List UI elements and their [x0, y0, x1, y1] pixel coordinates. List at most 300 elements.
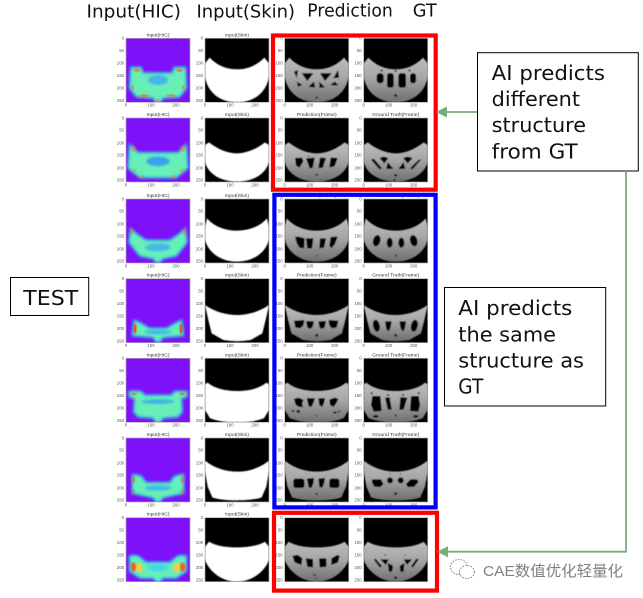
plot: row 3 HIC heatmap: 200 [117, 246, 125, 251]
plot: row 6 prediction frame: 100 [306, 502, 314, 507]
plot: row 1 HIC heatmap: 100 [117, 61, 125, 66]
callout: AI predicts the same structure as GT: structure as [458, 348, 584, 372]
plot: row 3 prediction frame: 100 [306, 263, 314, 268]
plot: row 1 prediction frame: 200 [275, 86, 283, 91]
plot: row 4 skin mask: Input(Skin) [225, 273, 249, 279]
plot: row 4 skin mask [196, 273, 269, 348]
plot: row 3 skin mask: 0 [204, 263, 207, 268]
plot: row 7 HIC heatmap: 0 [122, 515, 125, 520]
plot: row 6 prediction frame: 200 [275, 485, 283, 490]
plot: row 7 skin mask: Input(Skin) [225, 512, 249, 518]
row 6 plots [117, 432, 428, 507]
plot: row 4 ground truth frame: Ground Truth(Frame) [372, 273, 420, 279]
plot: row 1 ground truth frame: 150 [354, 73, 362, 78]
plot: row 5 prediction frame: 0 [280, 356, 283, 361]
plot: row 6 HIC heatmap: 200 [172, 502, 180, 507]
plot: row 1 prediction frame: 0 [280, 36, 283, 41]
plot: row 4 skin mask: 100 [196, 301, 204, 306]
plot: row 1 HIC heatmap: 250 [117, 98, 125, 103]
plot: row 2 skin mask: Input(Skin) [225, 112, 249, 118]
plot: row 5 skin mask: 50 [198, 368, 204, 373]
plot: row 7 ground truth frame: 150 [354, 552, 362, 557]
plot: row 3 HIC heatmap: 50 [119, 209, 125, 214]
plot: row 4 prediction frame: 200 [331, 343, 339, 348]
plot: row 2 skin mask: 0 [204, 182, 207, 187]
plot: row 5 HIC heatmap: 0 [125, 423, 128, 428]
plot: row 3 ground truth frame: 100 [354, 221, 362, 226]
callout: AI predicts the same structure as GT: GT [458, 374, 484, 398]
plot: row 2 skin mask: 200 [196, 165, 204, 170]
callout: AI predicts different structure from GT: AI predicts [492, 61, 605, 85]
plot: row 6 ground truth frame: 50 [357, 448, 362, 453]
plot: row 4 HIC heatmap: Input(HIC) [146, 273, 170, 279]
plot: row 5 HIC heatmap: 150 [117, 393, 125, 398]
plot: row 1 HIC heatmap: 0 [125, 103, 128, 108]
plot: row 7 HIC heatmap: 100 [117, 540, 125, 545]
plot: row 3 ground truth frame: Ground Truth(Frame) [372, 193, 420, 199]
plot: row 4 HIC heatmap: 100 [117, 301, 125, 306]
plot: row 4 prediction frame: 100 [306, 343, 314, 348]
plot: row 4 prediction frame: Prediction(Frame) [297, 273, 337, 279]
plot: row 7 HIC heatmap [117, 512, 190, 582]
plot: row 1 skin mask: 100 [196, 61, 204, 66]
plot: row 3 prediction frame: 250 [275, 259, 283, 264]
callout: AI predicts the same structure as GT [444, 288, 606, 406]
plot: row 3 ground truth frame: 150 [354, 234, 362, 239]
plot: row 3 HIC heatmap [117, 193, 190, 268]
plot: row 1 skin mask [196, 32, 269, 108]
plot: row 7 HIC heatmap: 50 [119, 527, 125, 532]
plot: row 3 skin mask: Input(Skin) [225, 193, 249, 199]
plot: row 1 prediction frame: 100 [275, 61, 283, 66]
plot: row 7 ground truth frame: 50 [357, 527, 362, 532]
plot: row 4 HIC heatmap: 200 [117, 326, 125, 331]
plot: row 6 skin mask: 200 [196, 485, 204, 490]
plot: row 2 skin mask: 50 [198, 128, 204, 133]
plot: row 5 skin mask: 100 [226, 423, 234, 428]
plot: row 1 skin mask: 150 [196, 73, 204, 78]
plot: row 6 prediction frame: 50 [278, 448, 283, 453]
plot: row 7 prediction frame: 50 [278, 527, 283, 532]
column heading: Prediction: Prediction [307, 1, 393, 22]
plot: row 6 ground truth frame: 0 [362, 502, 365, 507]
plot: row 4 ground truth frame [354, 273, 428, 348]
plot: row 2 skin mask: 200 [251, 182, 259, 187]
plot: row 5 skin mask: 0 [204, 423, 207, 428]
plot: row 4 prediction frame: 200 [275, 326, 283, 331]
plot: row 5 prediction frame: Prediction(Frame) [297, 352, 337, 358]
plot: row 1 skin mask: 250 [196, 98, 204, 103]
plot: row 5 prediction frame: 50 [278, 368, 283, 373]
plot: row 1 ground truth frame: 50 [357, 48, 362, 53]
row 7 plots [117, 512, 428, 582]
plot: row 5 skin mask: 0 [201, 356, 204, 361]
plot: row 3 skin mask [196, 193, 269, 268]
plot: row 2 skin mask: 150 [196, 153, 204, 158]
plot: row 7 skin mask: 150 [196, 552, 204, 557]
plot: row 3 HIC heatmap: 150 [117, 234, 125, 239]
plot: row 1 HIC heatmap: 50 [119, 48, 125, 53]
plot: row 6 ground truth frame: 100 [385, 502, 393, 507]
plot: row 1 skin mask: 100 [226, 103, 234, 108]
plot: row 6 HIC heatmap [117, 432, 190, 507]
plot: row 7 ground truth frame: 0 [359, 515, 362, 520]
plot: row 7 prediction frame: 250 [275, 577, 283, 582]
plot: row 6 prediction frame: 100 [275, 460, 283, 465]
plot: row 1 skin mask: 50 [198, 48, 204, 53]
plot: row 3 ground truth frame: 200 [410, 263, 418, 268]
plot: row 6 ground truth frame: 0 [359, 435, 362, 440]
plot: row 5 prediction frame: 250 [275, 418, 283, 423]
plot: row 6 skin mask: 0 [201, 435, 204, 440]
plot: row 5 HIC heatmap: Input(HIC) [146, 352, 170, 358]
plot: row 6 skin mask: 150 [196, 473, 204, 478]
plot: row 3 HIC heatmap: 100 [147, 263, 155, 268]
plot: row 3 skin mask: 200 [251, 263, 259, 268]
plot: row 3 skin mask: 50 [198, 209, 204, 214]
highlight box: top red [273, 36, 436, 190]
plot: row 1 prediction frame: 100 [306, 103, 314, 108]
plot: row 6 prediction frame: 250 [275, 498, 283, 503]
plot: row 6 HIC heatmap: 100 [117, 460, 125, 465]
plot: row 1 skin mask: 0 [204, 103, 207, 108]
plot: row 2 HIC heatmap: 0 [125, 182, 128, 187]
plot: row 3 ground truth frame: 250 [354, 259, 362, 264]
plot: row 3 ground truth frame [354, 193, 428, 268]
plot: row 4 skin mask: 50 [198, 288, 204, 293]
plot: row 3 prediction frame: 200 [331, 263, 339, 268]
plot: row 4 HIC heatmap: 0 [125, 343, 128, 348]
plot: row 1 ground truth frame [354, 36, 428, 108]
plot: row 1 HIC heatmap: 0 [122, 36, 125, 41]
plot: row 5 skin mask: 100 [196, 381, 204, 386]
plot: row 1 skin mask: 0 [201, 36, 204, 41]
plot: row 6 prediction frame: Prediction(Frame) [297, 432, 337, 438]
row 1 plots [117, 32, 428, 108]
plot: row 7 HIC heatmap: 150 [117, 552, 125, 557]
plot: row 4 ground truth frame: 50 [357, 288, 362, 293]
plot: row 3 prediction frame: 100 [275, 221, 283, 226]
plot: row 6 ground truth frame: 150 [354, 473, 362, 478]
callout: AI predicts different structure from GT: structure [492, 113, 586, 137]
plot: row 5 ground truth frame: 200 [354, 406, 362, 411]
plot: row 5 skin mask: 150 [196, 393, 204, 398]
row 5 plots [117, 352, 428, 428]
plot: row 2 HIC heatmap: 100 [147, 182, 155, 187]
plot: row 6 prediction frame: 0 [280, 435, 283, 440]
plot: row 1 prediction frame [275, 36, 349, 108]
plot: row 3 prediction frame: 50 [278, 209, 283, 214]
plot: row 1 ground truth frame: 0 [359, 36, 362, 41]
plot: row 2 prediction frame: 0 [280, 115, 283, 120]
plot: row 7 prediction frame: 150 [275, 552, 283, 557]
plot: row 1 HIC heatmap: Input(HIC) [146, 32, 170, 38]
plot: row 2 skin mask: 100 [196, 140, 204, 145]
plot: row 5 ground truth frame: 50 [357, 368, 362, 373]
plot: row 2 HIC heatmap: 200 [117, 165, 125, 170]
plot: row 2 prediction frame: 50 [278, 128, 283, 133]
plot: row 3 prediction frame: 200 [275, 246, 283, 251]
plot: row 5 HIC heatmap: 100 [147, 423, 155, 428]
plot: row 4 ground truth frame: 0 [362, 343, 365, 348]
plot: row 3 skin mask: 200 [196, 246, 204, 251]
plot: row 4 skin mask: 100 [226, 343, 234, 348]
plot: row 3 HIC heatmap: 0 [122, 196, 125, 201]
plot: row 1 skin mask: 200 [251, 103, 259, 108]
plot: row 1 ground truth frame: 0 [362, 103, 365, 108]
plot: row 2 ground truth frame: 100 [385, 182, 393, 187]
plot: row 4 skin mask: 200 [196, 326, 204, 331]
plot: row 5 ground truth frame: 100 [354, 381, 362, 386]
plot: row 2 ground truth frame: 200 [354, 165, 362, 170]
plot: row 6 HIC heatmap: 250 [117, 498, 125, 503]
plot: row 2 ground truth frame: 50 [357, 128, 362, 133]
plot: row 1 prediction frame: 0 [283, 103, 286, 108]
plot: row 1 HIC heatmap: 200 [172, 103, 180, 108]
plot: row 2 skin mask: 250 [196, 178, 204, 183]
plot: row 5 prediction frame: 200 [275, 406, 283, 411]
plot: row 2 prediction frame: 100 [275, 140, 283, 145]
plot: row 7 prediction frame: 100 [275, 540, 283, 545]
plot: row 5 skin mask: 250 [196, 418, 204, 423]
plot: row 6 ground truth frame: 200 [354, 485, 362, 490]
plot: row 1 HIC heatmap: 100 [147, 103, 155, 108]
plot: row 5 HIC heatmap: 200 [117, 406, 125, 411]
plot: row 7 skin mask [196, 512, 269, 582]
arrow: callout to top red box [436, 106, 477, 118]
row 4 plots [117, 273, 428, 348]
plot: row 3 HIC heatmap: 200 [172, 263, 180, 268]
plot: row 5 HIC heatmap: 200 [172, 423, 180, 428]
plot: row 1 HIC heatmap: 200 [117, 86, 125, 91]
plot: row 2 skin mask: 0 [201, 115, 204, 120]
plot: row 6 skin mask: 250 [196, 498, 204, 503]
plot: row 2 skin mask: 100 [226, 182, 234, 187]
plot: row 5 ground truth frame: 0 [359, 356, 362, 361]
plot: row 4 HIC heatmap: 150 [117, 313, 125, 318]
plot: row 4 HIC heatmap: 50 [119, 288, 125, 293]
plot: row 6 ground truth frame: 100 [354, 460, 362, 465]
plot: row 3 skin mask: 100 [196, 221, 204, 226]
plot: row 4 skin mask: 150 [196, 313, 204, 318]
plot: row 2 skin mask [196, 112, 269, 187]
plot: row 3 prediction frame: 150 [275, 234, 283, 239]
plot: row 5 skin mask [196, 352, 269, 428]
plot: row 2 prediction frame [275, 112, 349, 187]
plot: row 5 prediction frame [275, 352, 349, 428]
plot: row 6 prediction frame: 150 [275, 473, 283, 478]
plot: row 5 ground truth frame: 0 [362, 423, 365, 428]
plot: row 1 prediction frame: 150 [275, 73, 283, 78]
plot: row 5 HIC heatmap: 250 [117, 418, 125, 423]
plot: row 7 ground truth frame: 200 [354, 565, 362, 570]
plot: row 5 prediction frame: 0 [283, 423, 286, 428]
plot: row 3 HIC heatmap: 100 [117, 221, 125, 226]
plot: row 3 ground truth frame: 200 [354, 246, 362, 251]
row 2 plots [117, 112, 428, 187]
plot: row 4 prediction frame: 0 [280, 276, 283, 281]
plot: row 2 ground truth frame: 100 [354, 140, 362, 145]
plot: row 1 prediction frame: 250 [275, 98, 283, 103]
plot: row 2 HIC heatmap [117, 112, 190, 187]
plot: row 2 HIC heatmap: 0 [122, 115, 125, 120]
highlight box: middle blue [274, 195, 436, 507]
plot: row 1 HIC heatmap [117, 32, 190, 108]
plot: row 6 HIC heatmap: Input(HIC) [146, 432, 170, 438]
plot: row 3 prediction frame: 0 [283, 263, 286, 268]
plot: row 3 skin mask: 150 [196, 234, 204, 239]
plot: row 6 prediction frame: 0 [283, 502, 286, 507]
plot: row 1 prediction frame: 50 [278, 48, 283, 53]
plot: row 7 skin mask: 250 [196, 577, 204, 582]
plot: row 2 prediction frame: 100 [306, 182, 314, 187]
plot: row 6 skin mask: Input(Skin) [225, 432, 249, 438]
plot: row 3 ground truth frame: 0 [362, 263, 365, 268]
plot: row 6 skin mask: 100 [196, 460, 204, 465]
plot: row 7 skin mask: 100 [196, 540, 204, 545]
plot: row 3 ground truth frame: 50 [357, 209, 362, 214]
watermark text: CAE数值优化轻量化 [483, 563, 623, 580]
plot: row 2 ground truth frame: 250 [354, 178, 362, 183]
plot: row 5 HIC heatmap: 0 [122, 356, 125, 361]
plot: row 6 skin mask: 0 [204, 502, 207, 507]
plot: row 2 prediction frame: 150 [275, 153, 283, 158]
plot: row 5 ground truth frame: 150 [354, 393, 362, 398]
plot: row 1 HIC heatmap: 150 [117, 73, 125, 78]
plot: row 2 prediction frame: 0 [283, 182, 286, 187]
plot: row 4 ground truth frame: 0 [359, 276, 362, 281]
plot: row 1 skin mask: 200 [196, 86, 204, 91]
plot: row 7 HIC heatmap: Input(HIC) [146, 512, 170, 518]
plot: row 2 ground truth frame: 150 [354, 153, 362, 158]
plot: row 2 prediction frame: Prediction(Frame) [297, 112, 337, 118]
plot: row 6 ground truth frame: Ground Truth(Frame) [372, 432, 420, 438]
plot: row 2 HIC heatmap: 100 [117, 140, 125, 145]
plot: row 6 ground truth frame [354, 432, 428, 507]
column heading: GT: GT [413, 1, 438, 22]
plot: row 2 ground truth frame [354, 112, 428, 187]
plot: row 4 prediction frame: 0 [283, 343, 286, 348]
plot: row 6 HIC heatmap: 0 [125, 502, 128, 507]
plot: row 7 prediction frame: 200 [275, 565, 283, 570]
plot: row 5 ground truth frame: 250 [354, 418, 362, 423]
plot: row 4 HIC heatmap: 0 [122, 276, 125, 281]
plot: row 6 HIC heatmap: 100 [147, 502, 155, 507]
plot: row 6 prediction frame: 200 [331, 502, 339, 507]
plot: row 2 HIC heatmap: 200 [172, 182, 180, 187]
column heading: Input(HIC): Input(HIC) [86, 1, 181, 22]
callout: AI predicts different structure from GT [478, 53, 638, 171]
plot: row 4 prediction frame: 100 [275, 301, 283, 306]
plot: row 4 ground truth frame: 200 [354, 326, 362, 331]
plot: row 4 HIC heatmap [117, 273, 190, 348]
plot: row 4 ground truth frame: 150 [354, 313, 362, 318]
plot: row 4 ground truth frame: 200 [410, 343, 418, 348]
plot: row 3 HIC heatmap: 250 [117, 259, 125, 264]
plot: row 2 prediction frame: 250 [275, 178, 283, 183]
plot: row 4 HIC heatmap: 200 [172, 343, 180, 348]
plot: row 7 HIC heatmap: 250 [117, 577, 125, 582]
plot: row 2 HIC heatmap: 150 [117, 153, 125, 158]
plot: row 7 skin mask: 200 [196, 565, 204, 570]
plot: row 5 prediction frame: 100 [306, 423, 314, 428]
plot: row 3 skin mask: 100 [226, 263, 234, 268]
plot: row 7 skin mask: 50 [198, 527, 204, 532]
plot: row 6 skin mask: 50 [198, 448, 204, 453]
column heading: Input(Skin): Input(Skin) [196, 1, 295, 22]
plot: row 7 ground truth frame: 100 [354, 540, 362, 545]
plot: row 5 HIC heatmap: 50 [119, 368, 125, 373]
plot: row 5 HIC heatmap: 100 [117, 381, 125, 386]
plot: row 5 skin mask: 200 [251, 423, 259, 428]
label: TEST: TEST [22, 286, 79, 310]
plot: row 2 ground truth frame: 0 [362, 182, 365, 187]
plot: row 2 HIC heatmap: 250 [117, 178, 125, 183]
plot: row 6 skin mask: 100 [226, 502, 234, 507]
callout: AI predicts the same structure as GT: the same [458, 323, 556, 347]
plot: row 4 skin mask: 200 [251, 343, 259, 348]
plot: row 7 ground truth frame: 250 [354, 577, 362, 582]
plot: row 2 ground truth frame: Ground Truth(Frame) [372, 112, 420, 118]
plot: row 1 ground truth frame: 200 [354, 86, 362, 91]
callout: AI predicts different structure from GT: from GT [492, 139, 579, 163]
plot: row 7 prediction frame [275, 515, 349, 582]
plot: row 6 ground truth frame: 200 [410, 502, 418, 507]
callout: AI predicts different structure from GT: different [492, 87, 580, 111]
plot: row 4 ground truth frame: 100 [385, 343, 393, 348]
plot: row 2 ground truth frame: 200 [410, 182, 418, 187]
plot: row 3 prediction frame: Prediction(Frame) [297, 193, 337, 199]
plot: row 2 ground truth frame: 0 [359, 115, 362, 120]
plot: row 1 ground truth frame: 100 [354, 61, 362, 66]
plot: row 3 prediction frame: 0 [280, 196, 283, 201]
watermark icon [450, 560, 474, 578]
plot: row 6 HIC heatmap: 50 [119, 448, 125, 453]
plot: row 7 ground truth frame [354, 515, 428, 582]
plot: row 4 HIC heatmap: 250 [117, 338, 125, 343]
plot: row 4 skin mask: 0 [201, 276, 204, 281]
plot: row 4 prediction frame: 50 [278, 288, 283, 293]
plot: row 6 ground truth frame: 250 [354, 498, 362, 503]
plot: row 4 ground truth frame: 100 [354, 301, 362, 306]
plot: row 6 HIC heatmap: 0 [122, 435, 125, 440]
plot: row 5 HIC heatmap [117, 352, 190, 428]
plot: row 6 skin mask [196, 432, 269, 507]
callout: AI predicts the same structure as GT: AI predicts [458, 296, 572, 320]
plot: row 5 prediction frame: 150 [275, 393, 283, 398]
plot: row 5 prediction frame: 100 [275, 381, 283, 386]
plot: row 3 ground truth frame: 100 [385, 263, 393, 268]
plot: row 3 HIC heatmap: Input(HIC) [146, 193, 170, 199]
plot: row 2 HIC heatmap: Input(HIC) [146, 112, 170, 118]
plot: row 5 prediction frame: 200 [331, 423, 339, 428]
plot: row 2 prediction frame: 200 [275, 165, 283, 170]
plot: row 5 skin mask: 200 [196, 406, 204, 411]
plot: row 4 HIC heatmap: 100 [147, 343, 155, 348]
plot: row 6 HIC heatmap: 200 [117, 485, 125, 490]
plot: row 6 HIC heatmap: 150 [117, 473, 125, 478]
plot: row 1 skin mask: Input(Skin) [225, 32, 249, 38]
plot: row 3 skin mask: 0 [201, 196, 204, 201]
plot: row 4 skin mask: 0 [204, 343, 207, 348]
plot: row 7 prediction frame: 0 [280, 515, 283, 520]
plot: row 2 prediction frame: 200 [331, 182, 339, 187]
plot: row 4 ground truth frame: 250 [354, 338, 362, 343]
plot: row 5 ground truth frame [354, 352, 428, 428]
plot: row 4 prediction frame [275, 273, 349, 348]
plot: row 3 skin mask: 250 [196, 259, 204, 264]
plot: row 3 prediction frame [275, 193, 349, 268]
